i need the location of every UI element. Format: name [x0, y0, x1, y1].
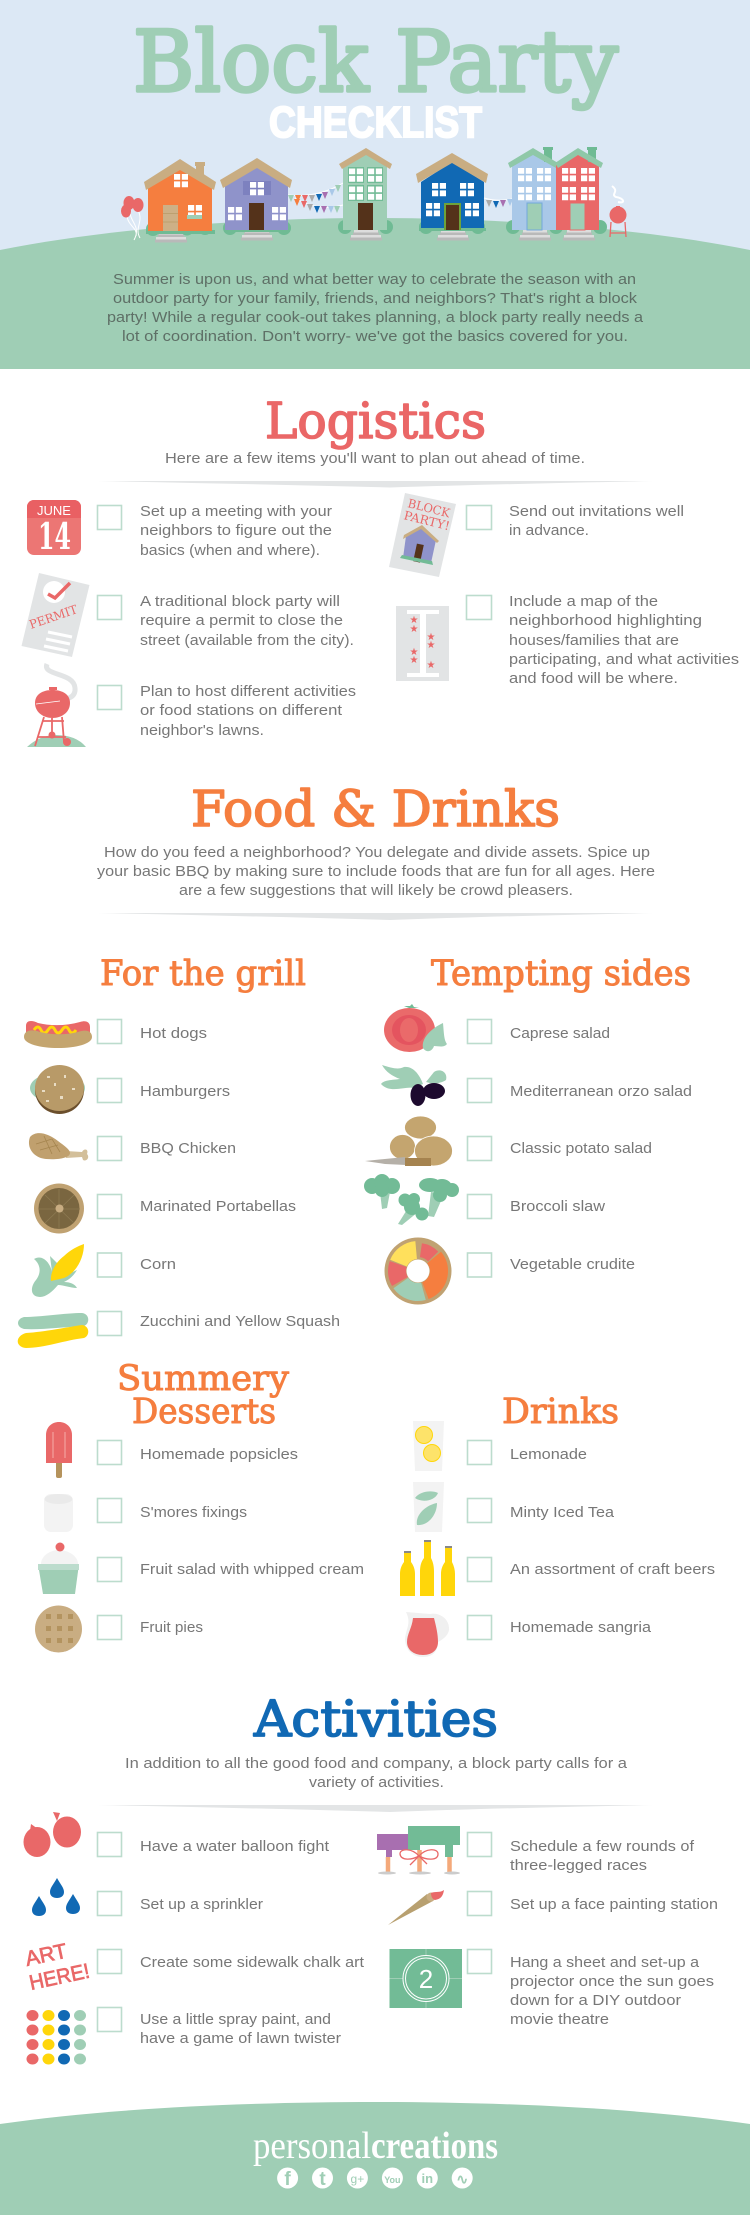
icon: pitcher [405, 1612, 449, 1657]
green hill [0, 218, 750, 369]
food intro: your basic BBQ by making sure to include foods that are fun for all ages. Here [97, 863, 655, 880]
icon: map: ★ [427, 632, 436, 643]
item: iced tea: Minty Iced Tea [510, 1504, 615, 1521]
activities intro: In addition to all the good food and company, a block party calls for a [125, 1755, 628, 1772]
logo: personalcreations: personal [253, 2125, 371, 2167]
activities intro: variety of activities. [309, 1774, 444, 1791]
icon: map: ★ [427, 660, 436, 671]
icon: map: ★ [410, 647, 419, 658]
item: activities [27, 664, 356, 747]
item: chalk art [23, 1940, 365, 1995]
icon: vegetable platter [384, 1238, 452, 1304]
footer hill [0, 2102, 750, 2215]
item: chalk art: Create some sidewalk chalk art [140, 1954, 365, 1971]
bunting: first string [288, 183, 343, 213]
icon: map: ★ [410, 624, 419, 635]
subheading: summery desserts: Desserts [132, 1392, 276, 1432]
item: meeting: neighbors to figure out the [140, 522, 332, 539]
icon: chicken leg [29, 1133, 88, 1160]
item: beers: An assortment of craft beers [510, 1561, 715, 1578]
icon: popsicle [46, 1422, 72, 1478]
social icons [277, 2168, 473, 2190]
intro text [107, 271, 644, 345]
panel: header [0, 0, 750, 369]
item: orzo [381, 1065, 692, 1106]
item: map [396, 593, 739, 687]
item: outdoor movie: movie theatre [510, 2011, 609, 2028]
item: fruit salad: Fruit salad with whipped cream [140, 1561, 364, 1578]
icon: art here [23, 1940, 92, 1995]
subtitle: checklist: CHECKLIST [269, 98, 482, 147]
panel: footer [0, 2102, 750, 2215]
social icons: ∿ [456, 2171, 468, 2187]
heading: food and drinks: Food & Drinks [191, 780, 560, 838]
item: caprese: Caprese salad [510, 1025, 610, 1042]
item: iced tea [413, 1482, 615, 1532]
icon: marshmallow [44, 1494, 73, 1532]
item: map: and food will be where. [509, 670, 678, 687]
item: popsicles [46, 1422, 298, 1478]
item: permit: street (available from the city). [140, 632, 354, 649]
item: corn: Corn [140, 1256, 176, 1273]
item: caprese [384, 1004, 610, 1052]
item: invitations: Send out invitations well [509, 503, 684, 520]
icon: calendar: 14 [38, 516, 71, 558]
item: sprinkler [32, 1878, 263, 1916]
house: light blue [506, 147, 563, 240]
item: water balloons: Have a water balloon fight [140, 1838, 330, 1855]
item: map: houses/families that are [509, 632, 679, 649]
item: beers [400, 1540, 715, 1596]
item: outdoor movie: Hang a sheet and set-up a [510, 1954, 700, 1971]
item: face painting [388, 1890, 718, 1925]
icon: poster: PARTY! [402, 508, 451, 533]
logo: personalcreations: creations [371, 2125, 498, 2167]
item: invitations: in advance. [509, 522, 589, 539]
item: three-legged race [377, 1826, 695, 1874]
house: orange [144, 159, 216, 242]
icon: paint brush [388, 1890, 444, 1925]
item: corn [32, 1244, 176, 1297]
food intro: are a few suggestions that will likely be crowd pleasers. [179, 882, 573, 899]
item: hot dogs [24, 1020, 207, 1048]
item: three-legged race: Schedule a few rounds of [510, 1838, 695, 1855]
icon: water balloons [24, 1812, 81, 1857]
item: activities: or food stations on different [140, 702, 343, 719]
food intro [97, 844, 655, 899]
intro text: party! While a regular cook-out takes planning, a block party really needs a [107, 309, 644, 326]
item: permit: A traditional block party will [140, 593, 340, 610]
item: pies [35, 1606, 203, 1652]
item: broccoli [364, 1174, 605, 1225]
social icons: You [384, 2175, 401, 2185]
icon: three-legged race [377, 1826, 460, 1874]
item: hamburgers: Hamburgers [140, 1083, 230, 1100]
item: water balloons [24, 1812, 330, 1857]
item: lemonade: Lemonade [510, 1446, 587, 1463]
subheading: drinks: Drinks [502, 1392, 619, 1432]
item: meeting [27, 500, 332, 559]
item: sangria: Homemade sangria [510, 1619, 652, 1636]
heading: activities: Activities [253, 1690, 498, 1748]
item: popsicles: Homemade popsicles [140, 1446, 298, 1463]
icon: map: ★ [410, 655, 419, 666]
icon: map: ★ [410, 615, 419, 626]
icon: permit: PERMIT [27, 602, 79, 632]
icon: zucchini and squash [18, 1313, 88, 1348]
item: portabellas: Marinated Portabellas [140, 1198, 296, 1215]
balloons [121, 196, 144, 240]
subheading: summery desserts [117, 1359, 289, 1432]
item: outdoor movie: projector once the sun goes [510, 1973, 714, 1990]
icon: cupcake [38, 1542, 79, 1594]
item: face painting: Set up a face painting station [510, 1896, 718, 1913]
item: meeting: Set up a meeting with your [140, 503, 332, 520]
panel: food and drinks [18, 780, 715, 1657]
item: activities: neighbor's lawns. [140, 722, 264, 739]
icon: water drops [32, 1878, 80, 1916]
item: permit [22, 573, 354, 657]
item: permit: require a permit to close the [140, 612, 343, 629]
bunting: second string [484, 198, 513, 208]
social icons: t [319, 2169, 326, 2190]
item: portabellas [34, 1184, 296, 1234]
item: lawn twister: Use a little spray paint, and [140, 2011, 331, 2028]
item: smores: S'mores fixings [140, 1504, 247, 1521]
icon: calendar [27, 500, 81, 558]
icon: corn [32, 1244, 84, 1297]
small grill with smoke [610, 186, 626, 237]
icon: lemonade glass [413, 1421, 444, 1471]
item: activities: Plan to host different activities [140, 683, 356, 700]
item: three-legged race: three-legged races [510, 1857, 647, 1874]
icon: potatoes and knife [365, 1116, 452, 1166]
item: pies: Fruit pies [140, 1619, 203, 1636]
icon: beer bottles [400, 1540, 455, 1596]
icon: pie [35, 1606, 82, 1652]
logo: personalcreations [253, 2125, 498, 2167]
item: outdoor movie: down for a DIY outdoor [510, 1992, 681, 2009]
item: hot dogs: Hot dogs [140, 1025, 207, 1042]
social icons: in [422, 2171, 433, 2186]
item: smores [44, 1494, 247, 1532]
house: green [338, 148, 393, 240]
house: blue [416, 153, 488, 240]
item: crudite [384, 1238, 635, 1304]
item: sangria [405, 1612, 652, 1657]
item: chicken [29, 1133, 236, 1160]
icon: grill [27, 664, 86, 747]
social icons: g+ [351, 2172, 364, 2186]
icon: map [396, 606, 449, 681]
icon: map: ★ [427, 640, 436, 651]
intro text: Summer is upon us, and what better way to celebrate the season with an [113, 271, 636, 288]
icon: movie countdown [390, 1949, 462, 2008]
icon: art here: HERE! [27, 1960, 92, 1995]
panel: activities [23, 1690, 718, 2064]
icon: tea glass [413, 1482, 444, 1532]
icon: movie countdown: 2 [419, 1964, 433, 1994]
food intro: How do you feed a neighborhood? You delegate and divide assets. Spice up [104, 844, 650, 861]
item: map: Include a map of the [509, 593, 658, 610]
item: lawn twister [26, 2008, 341, 2064]
subheading: for the grill: For the grill [100, 954, 306, 994]
item: map: participating, and what activities [509, 651, 739, 668]
item: potato salad [365, 1116, 652, 1166]
icon: art here: ART [23, 1940, 69, 1971]
item: orzo: Mediterranean orzo salad [510, 1083, 692, 1100]
icon: olives [381, 1065, 446, 1106]
item: outdoor movie [390, 1949, 714, 2028]
logistics intro: Here are a few items you'll want to plan out ahead of time. [165, 450, 585, 467]
panel: logistics [22, 392, 739, 747]
icon: permit [22, 573, 90, 657]
item: broccoli: Broccoli slaw [510, 1198, 605, 1215]
icon: poster [389, 493, 456, 577]
item: crudite: Vegetable crudite [510, 1256, 635, 1273]
item: hamburgers [30, 1065, 230, 1114]
icon: calendar: JUNE [37, 503, 71, 518]
house: purple [220, 158, 292, 240]
item: potato salad: Classic potato salad [510, 1140, 652, 1157]
intro text: outdoor party for your family, friends, and neighbors? That's right a block [113, 290, 638, 307]
item: sprinkler: Set up a sprinkler [140, 1896, 263, 1913]
icon: hamburger [30, 1065, 85, 1114]
intro text: lot of coordination. Don't worry- we've got the basics covered for you. [122, 328, 628, 345]
item: zucchini [18, 1312, 340, 1348]
icon: twister dots [26, 2010, 86, 2064]
activities intro [125, 1755, 628, 1791]
item: map: neighborhood highlighting [509, 612, 702, 629]
heading: logistics: Logistics [265, 392, 486, 450]
item: meeting: basics (when and where). [140, 542, 320, 559]
subheading: summery desserts: Summery [117, 1359, 289, 1399]
item: invitations [389, 493, 684, 577]
icon: poster: BLOCK [406, 496, 452, 521]
title: Block Party [133, 13, 619, 111]
sky background [0, 0, 750, 260]
item: zucchini: Zucchini and Yellow Squash [140, 1313, 340, 1330]
item: chicken: BBQ Chicken [140, 1140, 236, 1157]
item: lemonade [413, 1421, 587, 1471]
house: red [555, 147, 607, 240]
icon: mushroom [34, 1184, 84, 1234]
icon: broccoli [364, 1174, 459, 1225]
item: lawn twister: have a game of lawn twister [140, 2030, 341, 2047]
icon: hot dog [24, 1021, 92, 1048]
social icons: f [284, 2169, 291, 2190]
item: fruit salad [38, 1542, 364, 1594]
subheading: tempting sides: Tempting sides [431, 954, 691, 994]
icon: tomato [384, 1004, 447, 1052]
